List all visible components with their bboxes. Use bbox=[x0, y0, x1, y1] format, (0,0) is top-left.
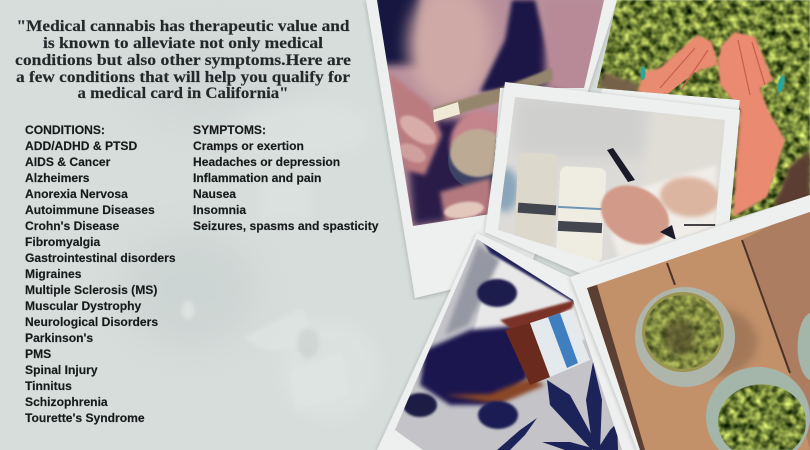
conditions list: Schizophrenia bbox=[25, 395, 108, 409]
conditions list: Migraines bbox=[25, 267, 82, 281]
conditions list: Alzheimers bbox=[25, 171, 90, 185]
symptoms list: Headaches or depression bbox=[193, 155, 340, 169]
icon: jar two bbox=[706, 367, 810, 450]
conditions list: Fibromyalgia bbox=[25, 235, 101, 249]
title quote: conditions but also other symptoms.Here are bbox=[15, 52, 351, 69]
conditions list: PMS bbox=[25, 347, 51, 361]
title quote: a few conditions that will help you qualify for bbox=[16, 69, 350, 86]
conditions list: Tinnitus bbox=[25, 379, 72, 393]
symptoms list: Seizures, spasms and spasticity bbox=[193, 219, 379, 233]
conditions list: Spinal Injury bbox=[25, 363, 98, 377]
photo: prescription pad and pill bottles bbox=[485, 82, 740, 282]
symptoms list: SYMPTOMS: bbox=[193, 123, 266, 137]
title quote: a medical card in California" bbox=[78, 85, 288, 102]
title quote: is known to alleviate not only medical bbox=[43, 35, 324, 52]
photo: hand holding joint and grinder bbox=[366, 0, 617, 300]
image: bottles and writing hand bbox=[498, 97, 725, 262]
conditions list: Muscular Dystrophy bbox=[25, 299, 142, 313]
conditions list: CONDITIONS: bbox=[25, 123, 105, 137]
image: woman rolling joint bbox=[372, 0, 605, 226]
conditions list bbox=[25, 123, 176, 425]
photo: jars of buds on wooden table bbox=[570, 195, 810, 450]
conditions list: AIDS & Cancer bbox=[25, 155, 111, 169]
symptoms list: Cramps or exertion bbox=[193, 139, 304, 153]
photo: pill bottle on cannabis leaf paper bbox=[377, 233, 637, 450]
conditions list: Anorexia Nervosa bbox=[25, 187, 128, 201]
symptoms list: Nausea bbox=[193, 187, 236, 201]
title quote: "Medical cannabis has therapeutic value and bbox=[16, 18, 350, 35]
title quote bbox=[15, 18, 351, 102]
symptoms list: Insomnia bbox=[193, 203, 246, 217]
icon: cannabis leaf bbox=[497, 362, 618, 450]
icon: jar three bbox=[798, 313, 810, 380]
conditions list: Tourette's Syndrome bbox=[25, 411, 145, 425]
photo: cupped hands over cannabis buds bbox=[597, 0, 810, 222]
icon: jar one bbox=[635, 287, 735, 387]
image: hands and buds bbox=[590, 0, 810, 230]
symptoms list bbox=[193, 123, 379, 233]
conditions list: Crohn's Disease bbox=[25, 219, 120, 233]
conditions list: Gastrointestinal disorders bbox=[25, 251, 176, 265]
image: amber bottle and leaf bbox=[390, 235, 630, 450]
conditions list: Autoimmune Diseases bbox=[25, 203, 155, 217]
conditions list: ADD/ADHD & PTSD bbox=[25, 139, 137, 153]
symptoms list: Inflammation and pain bbox=[193, 171, 321, 185]
conditions list: Parkinson's bbox=[25, 331, 93, 345]
conditions list: Neurological Disorders bbox=[25, 315, 158, 329]
image: wood table and jars bbox=[580, 205, 810, 450]
conditions list: Multiple Sclerosis (MS) bbox=[25, 283, 157, 297]
